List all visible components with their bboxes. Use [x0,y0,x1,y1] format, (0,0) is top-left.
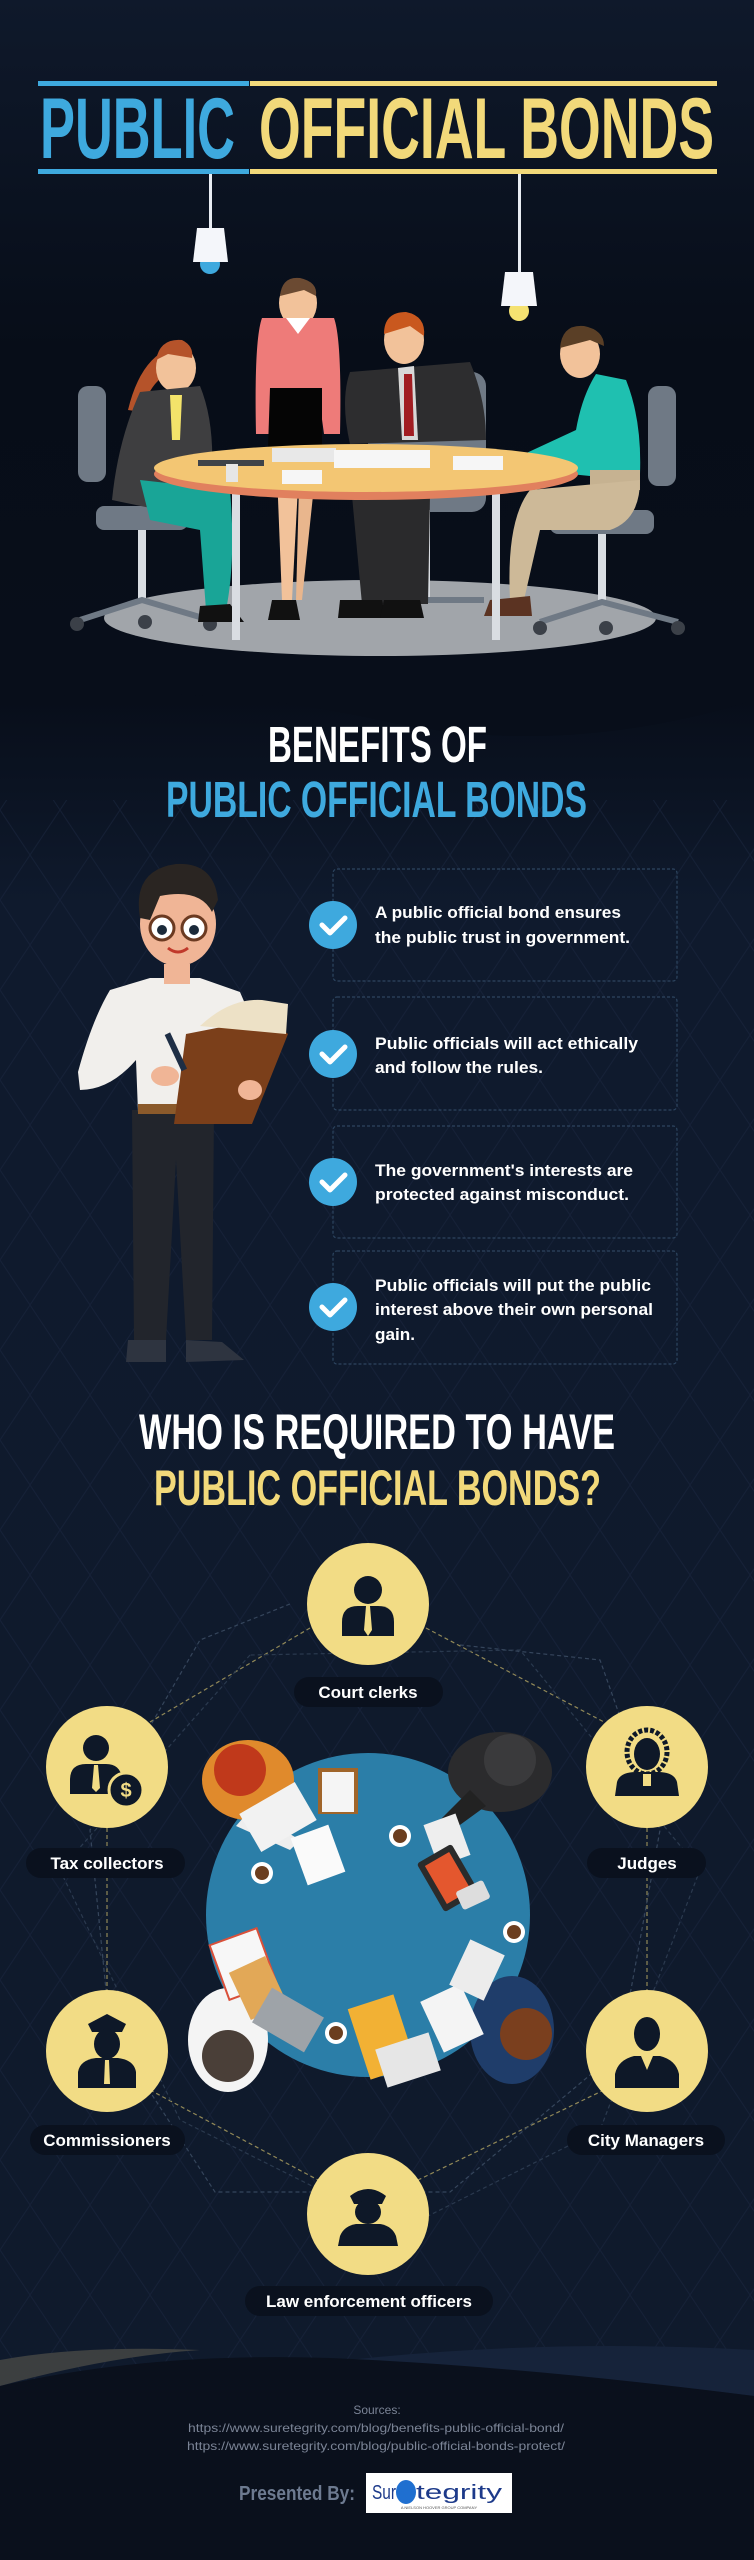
person bottom-left [188,1988,268,2092]
label: tax collectors [26,1848,185,1878]
table [154,444,578,640]
text block: benefit 3: protected against misconduct. [375,1185,629,1204]
logo: suretegrity: tegrity [416,2482,502,2504]
icon: court clerks [307,1543,429,1665]
person: man with red tie [338,312,486,618]
text block: benefit 2: and follow the rules. [375,1058,543,1077]
icon: hanging lamp yellow [501,174,537,321]
presented by [239,2473,512,2513]
title: PUBLIC [40,81,235,177]
title [38,81,717,177]
icon: check [309,1158,357,1206]
icon: check [309,1030,357,1078]
person top-right [430,1732,552,1838]
label: judges: Judges [617,1854,677,1873]
sources [187,2403,566,2453]
panel: benefit 2 [309,997,677,1110]
icon: tax collectors: $ [120,1780,132,1802]
text block: benefit 3: The government's interests are [375,1161,633,1180]
label: law enforcement officers: Law enforcement officers [266,2292,472,2311]
panel: benefit 4 [309,1251,677,1364]
label: judges [587,1848,706,1878]
icon: hanging lamp blue [193,174,228,274]
icon: check [309,901,357,949]
logo: suretegrity [366,2473,512,2513]
sources: Sources: [353,2403,401,2417]
label: city managers: City Managers [588,2131,704,2150]
illustration: round table top view [188,1732,554,2092]
label: city managers [567,2125,725,2155]
label: commissioners: Commissioners [43,2131,171,2150]
label: commissioners [30,2125,185,2155]
person bottom-right [470,1976,554,2084]
illustration: man with clipboard [78,864,288,1362]
left chair [70,386,217,631]
sources: https://www.suretegrity.com/blog/benefits-public-official-bond/ [188,2421,565,2435]
label: tax collectors: Tax collectors [50,1854,164,1873]
text block: benefit 4: interest above their own personal [375,1300,653,1319]
label: court clerks: Court clerks [318,1683,418,1702]
logo: suretegrity: A NIELSON HOOVER GROUP COMPANY [401,2505,477,2510]
illustration: meeting table scene [70,278,685,656]
back chair [368,372,486,600]
icon: city managers [586,1990,708,2112]
sources: https://www.suretegrity.com/blog/public-official-bonds-protect/ [187,2439,566,2453]
icon: check [309,1283,357,1331]
right chair [533,386,685,635]
person: man in teal sweater [484,326,640,616]
logo: suretegrity: Sur [372,2482,396,2504]
label: law enforcement officers [245,2286,493,2316]
icon: commissioners [46,1990,168,2112]
connector lines [60,1604,700,2230]
panel: benefit 1 [309,869,677,981]
person: standing woman [256,278,340,620]
presented by: Presented By: [239,2483,355,2505]
footer wave [0,2346,754,2560]
person: seated woman left [112,340,244,622]
text block: benefit 1: A public official bond ensures [375,903,621,922]
icon: tax collectors [46,1706,168,1828]
text block: benefit 4: gain. [375,1325,415,1344]
heading: benefits [166,716,587,828]
heading: who is required [139,1404,615,1516]
text block: benefit 2: Public officials will act ethically [375,1034,639,1053]
panel: benefit 3 [309,1126,677,1238]
label: court clerks [294,1677,443,1707]
icon: law enforcement officers [307,2153,429,2275]
icon: judges [586,1706,708,1828]
heading: benefits: BENEFITS OF [268,716,487,773]
text block: benefit 4: Public officials will put the public [375,1276,651,1295]
papers [210,1768,525,2088]
person top-left [202,1740,300,1850]
text block: benefit 1: the public trust in government. [375,928,630,947]
